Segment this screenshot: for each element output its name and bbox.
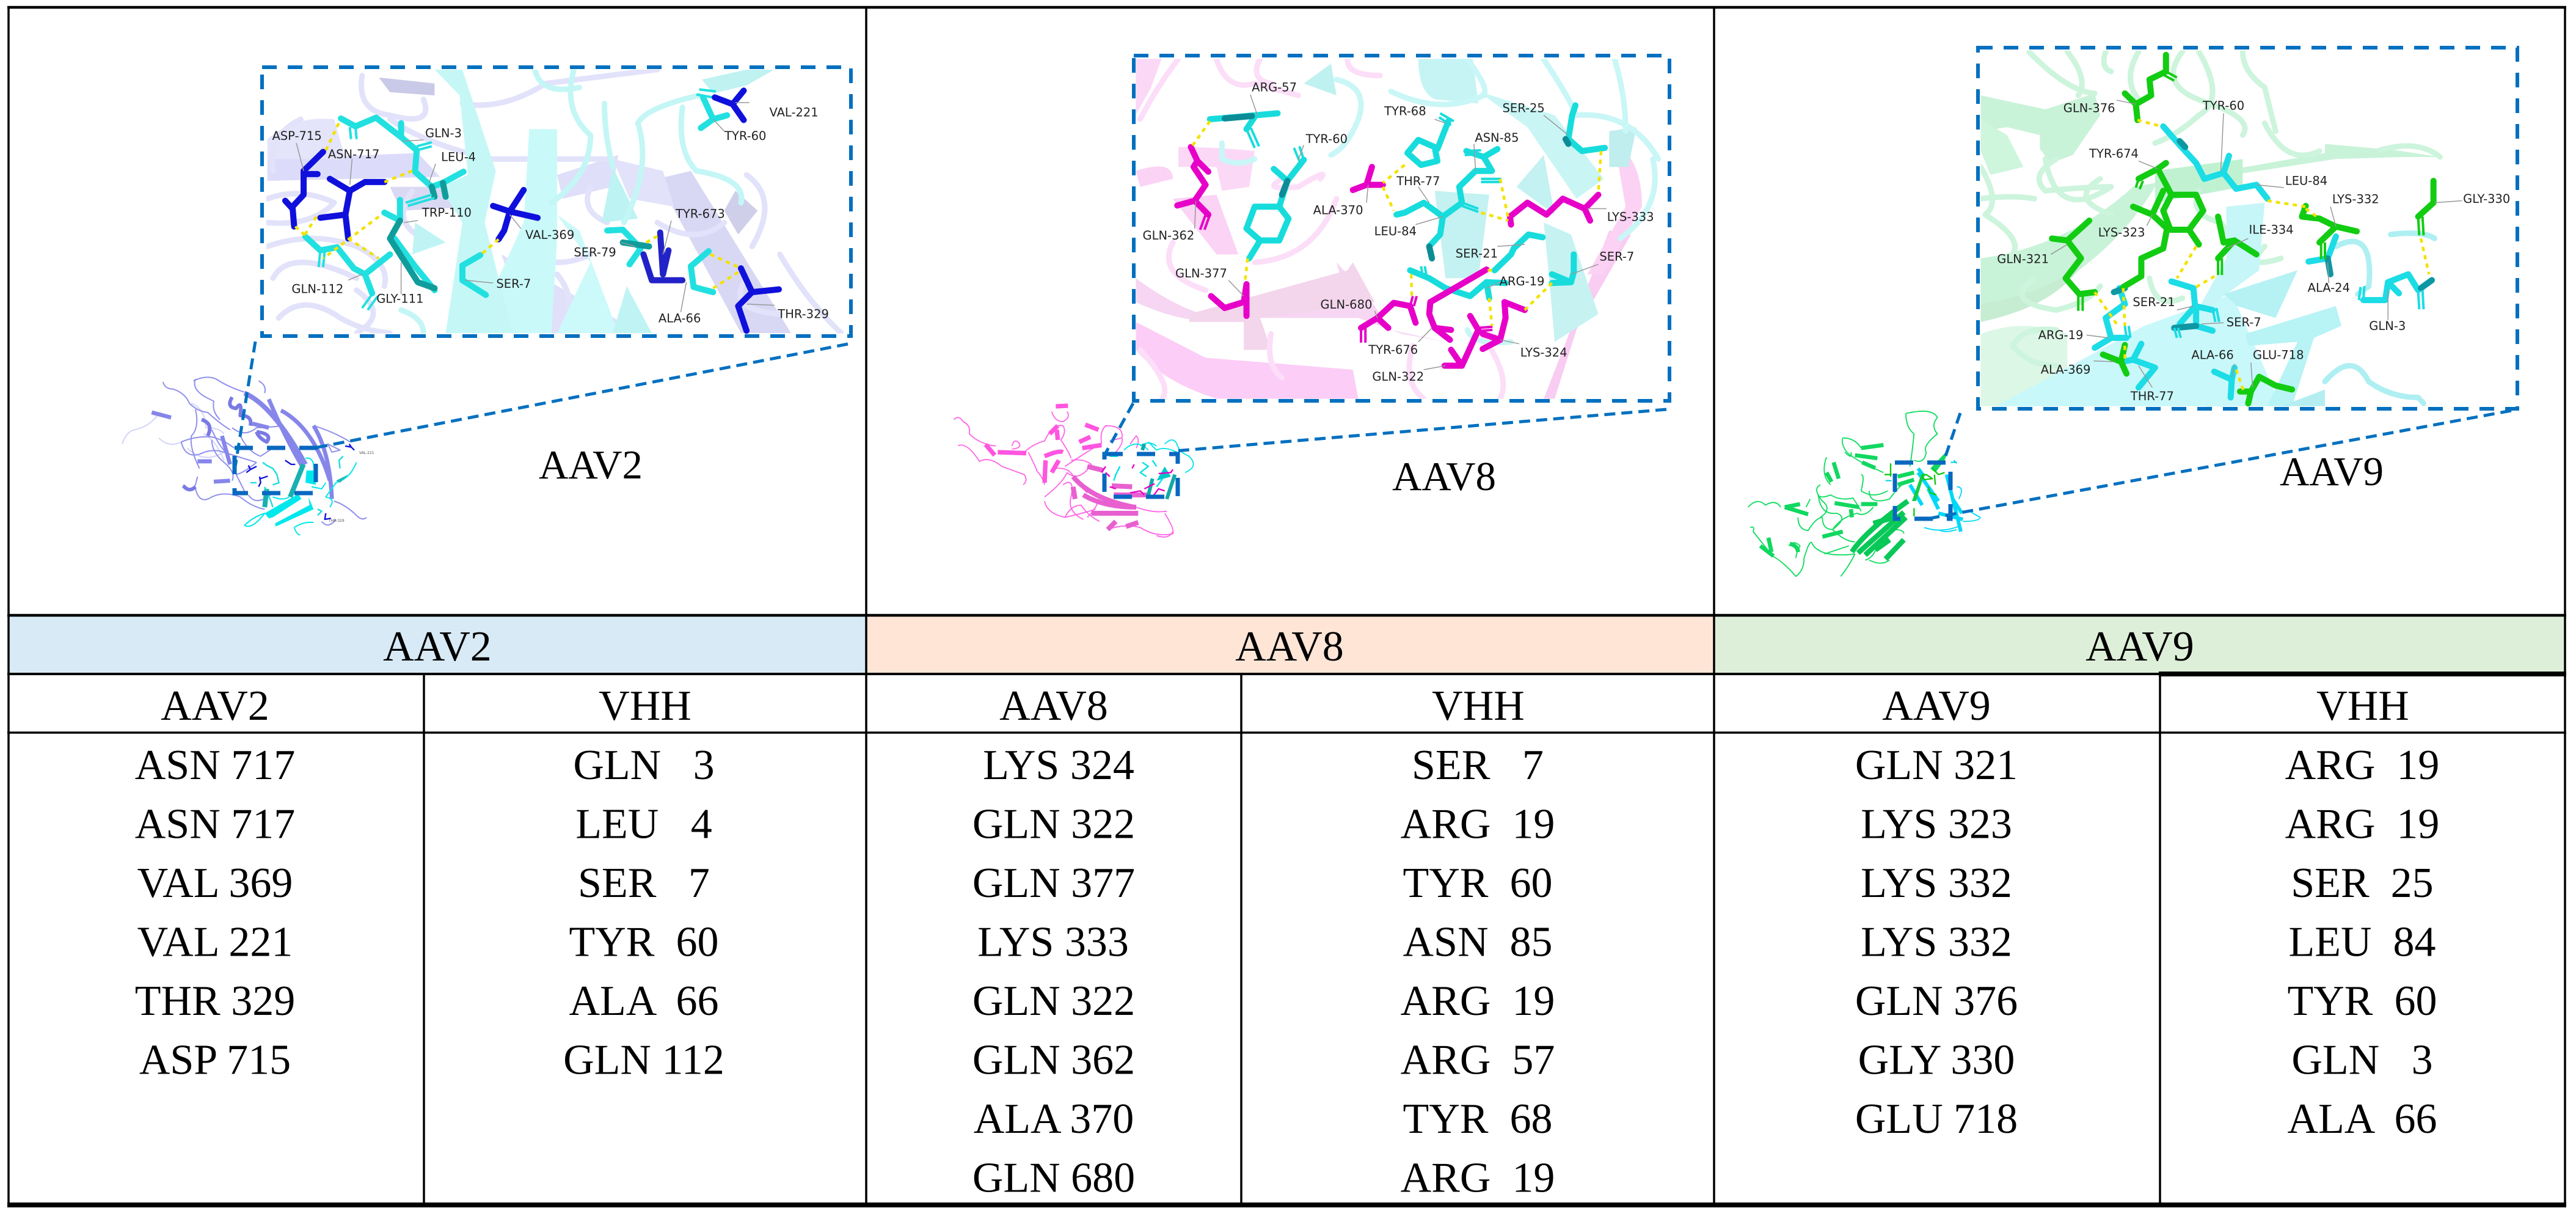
table column: AAV9 residues (1855, 683, 2018, 1143)
AAV8 inset: residue labels: GLN-377 (1175, 266, 1227, 280)
AAV2 inset: residue labels: SER-79 (574, 246, 616, 260)
table column: AAV2 residues: VAL 221 (137, 919, 293, 965)
AAV9 inset: residue labels: ALA-24 (2308, 280, 2350, 295)
table column: AAV8 residues (972, 683, 1135, 1201)
zoom indicator: AAV2 selection box and connector lines (235, 342, 848, 493)
table column: AAV8 residues: AAV8 (999, 683, 1108, 730)
AAV8 inset: residue labels: LYS-333 (1607, 210, 1654, 224)
table column: AAV9 residues: GLU 718 (1855, 1096, 2018, 1143)
AAV8 inset: residue labels: GLN-362 (1142, 229, 1194, 243)
AAV2 inset: residue labels: LEU-4 (441, 150, 476, 164)
AAV2 inset: residue labels: TRP-110 (421, 206, 472, 220)
table column: VHH partners of AAV2: GLN 3 (573, 742, 715, 789)
AAV9 inset: residue labels: TYR-60 (2202, 99, 2244, 113)
table column: AAV8 residues: LYS 324 (983, 742, 1134, 789)
AAV9 inset: residue labels: GLN-321 (1997, 252, 2049, 266)
table column: VHH partners of AAV8: ARG 19 (1401, 800, 1555, 848)
table column: VHH partners of AAV8: ARG 57 (1401, 1036, 1555, 1084)
AAV9 inset: residue labels: SER-7 (2227, 315, 2261, 329)
table column: AAV2 residues: ASN 717 (135, 742, 295, 789)
AAV8 inset: pale ribbon background (1136, 58, 1658, 398)
table column: AAV9 residues: LYS 323 (1861, 800, 2012, 848)
AAV2 inset: AAV2 residue sticks (blue) (285, 90, 779, 331)
table column: AAV2 residues (135, 683, 295, 1084)
table column: VHH partners of AAV9: GLN 3 (2291, 1036, 2433, 1084)
AAV9 inset: residue labels: GLU-718 (2253, 348, 2304, 362)
AAV2 inset: residue labels: VAL-369 (525, 228, 574, 242)
table column: AAV9 residues: GLN 321 (1855, 742, 2018, 789)
AAV2 inset: residue labels: GLN-3 (425, 126, 462, 140)
table column: VHH partners of AAV2: SER 7 (578, 860, 710, 907)
table column: AAV8 residues: GLN 322 (972, 800, 1135, 848)
AAV9 inset: residue labels: LEU-84 (2285, 174, 2327, 188)
table column: AAV8 residues: GLN 680 (972, 1155, 1135, 1201)
table column: AAV9 residues: LYS 332 (1861, 919, 2012, 965)
table column: AAV9 residues: AAV9 (1882, 683, 1991, 730)
table column: AAV9 residues: LYS 332 (1861, 860, 2012, 907)
table column: AAV8 residues: LYS 333 (977, 919, 1129, 965)
table column: VHH partners of AAV9: ALA 66 (2287, 1096, 2437, 1143)
panel caption: AAV2: AAV2 (539, 442, 643, 488)
panel caption: AAV9: AAV9 (2280, 449, 2384, 494)
table header band: AAV8 (866, 617, 1714, 673)
AAV8 inset: residue labels: TYR-68 (1384, 104, 1426, 119)
table header band: AAV2: AAV2 (383, 623, 492, 670)
AAV8 inset: label leader lines (1195, 95, 1607, 370)
AAV2 inset: residue labels: GLY-111 (376, 292, 423, 306)
panel: AAV9 inset close-up (1980, 52, 2510, 406)
AAV9 inset: residue labels: LYS-323 (2098, 225, 2145, 240)
AAV9 inset: residue labels: ALA-66 (2191, 348, 2234, 362)
AAV9 inset: VHH residue sticks (cyan) (2095, 126, 2432, 398)
AAV9 inset: residue labels: SER-21 (2133, 295, 2175, 309)
AAV8 inset: residue labels: SER-25 (1503, 101, 1545, 115)
AAV2 inset: pale ribbon background (268, 70, 841, 333)
AAV9 inset: residue labels: ILE-334 (2249, 222, 2294, 236)
AAV9 inset: residue labels: THR-77 (2130, 389, 2174, 403)
table header band: AAV9: AAV9 (2085, 623, 2194, 670)
table column: AAV8 residues: ALA 370 (974, 1096, 1134, 1143)
AAV8 inset: residue labels: LYS-324 (1520, 345, 1567, 359)
AAV8 inset: residue labels: ARG-57 (1252, 81, 1297, 95)
AAV9 inset: AAV9 residue sticks (green) (2052, 55, 2434, 403)
AAV2 inset: label leader lines (296, 103, 775, 312)
panel: AAV8 inset close-up (1136, 58, 1658, 398)
AAV2 inset: residue labels: TYR-673 (675, 207, 725, 221)
AAV8 inset: AAV8 residue sticks (magenta) (1177, 147, 1598, 365)
AAV2 inset: residue labels: ASP-715 (272, 129, 322, 143)
table column: VHH partners of AAV9: ARG 19 (2285, 742, 2439, 789)
table column: AAV9 residues: GLN 376 (1855, 978, 2018, 1025)
AAV2 inset: VHH residue sticks (cyan) (305, 89, 727, 310)
AAV8 inset: VHH residue sticks (cyan) (1210, 105, 1605, 298)
AAV8 inset: hydrogen bonds (1192, 121, 1601, 326)
icon: AAV9 whole-complex ribbon thumbnail (1748, 411, 1980, 576)
table column: AAV2 residues: AAV2 (161, 683, 269, 730)
AAV9 inset frame (1978, 48, 2517, 409)
table column: AAV8 residues: GLN 377 (972, 860, 1135, 907)
AAV2 inset: residue labels: SER-7 (496, 277, 531, 291)
table header band: AAV2 (9, 617, 866, 673)
AAV9 inset: residue labels: GLY-330 (2463, 192, 2510, 206)
AAV8 inset: residue labels: ALA-370 (1313, 203, 1363, 218)
AAV2 inset: residue labels: GLN-112 (291, 282, 343, 296)
zoom indicator: AAV9 selection box and connector lines (1895, 411, 2511, 519)
table column: VHH partners of AAV9 (2285, 683, 2439, 1143)
AAV9 inset: pale ribbon background (1980, 52, 2440, 406)
table column: AAV8 residues: GLN 362 (972, 1036, 1135, 1084)
table column: VHH partners of AAV2: LEU 4 (575, 800, 712, 848)
AAV9 inset: residue labels: ARG-19 (2038, 328, 2083, 342)
table column: VHH partners of AAV8: ASN 85 (1403, 919, 1553, 965)
icon: AAV8 whole-complex ribbon thumbnail (954, 406, 1194, 537)
AAV2 inset frame (262, 67, 851, 336)
table column: VHH partners of AAV8: TYR 60 (1403, 860, 1553, 907)
table column: AAV2 residues: ASP 715 (139, 1036, 291, 1084)
table column: VHH partners of AAV8 (1401, 683, 1555, 1201)
icon: AAV2 whole-complex ribbon thumbnail (122, 377, 374, 535)
table column: VHH partners of AAV8: ARG 19 (1401, 1155, 1555, 1201)
AAV9 inset: residue labels: GLN-3 (2369, 319, 2406, 333)
zoom indicator: AAV8 selection box and connector lines (1104, 403, 1666, 497)
table column: AAV9 residues: GLY 330 (1858, 1036, 2015, 1084)
AAV2 inset: residue labels: TYR-60 (724, 129, 766, 143)
table column: VHH partners of AAV2: VHH (599, 683, 691, 730)
table header band: AAV8: AAV8 (1235, 623, 1344, 670)
table column: VHH partners of AAV8: ARG 19 (1401, 978, 1555, 1025)
table column: VHH partners of AAV8: TYR 68 (1403, 1096, 1553, 1143)
AAV2 inset: residue labels (272, 106, 829, 326)
table column: VHH partners of AAV9: LEU 84 (2288, 919, 2436, 965)
AAV8 inset: residue labels: GLN-680 (1321, 298, 1372, 312)
AAV2 inset: residue labels: ALA-66 (659, 312, 701, 326)
AAV9 inset: residue labels: TYR-674 (2089, 147, 2139, 161)
table column: AAV2 residues: THR 329 (135, 978, 295, 1025)
AAV9 inset: residue labels (1997, 99, 2510, 403)
AAV9 inset: residue labels: ALA-369 (2041, 362, 2090, 376)
AAV8 inset: residue labels: SER-21 (1456, 247, 1498, 261)
table column: VHH partners of AAV2: ALA 66 (569, 978, 718, 1025)
table column: VHH partners of AAV9: TYR 60 (2287, 978, 2437, 1025)
AAV9 inset: residue labels: GLN-376 (2063, 101, 2115, 115)
table column: VHH partners of AAV2: TYR 60 (569, 919, 718, 965)
AAV8 inset: residue labels: ARG-19 (1500, 274, 1544, 288)
table column: AAV2 residues: ASN 717 (135, 800, 295, 848)
AAV8 inset: residue labels: SER-7 (1599, 250, 1634, 264)
icon: AAV2 whole-complex ribbon thumbnail: THR-329 (328, 519, 345, 523)
table column: AAV8 residues: GLN 322 (972, 978, 1135, 1025)
table column: AAV2 residues: VAL 369 (137, 860, 293, 907)
icon: AAV2 whole-complex ribbon thumbnail: VAL-221 (359, 451, 374, 455)
AAV8 inset: residue labels: GLN-322 (1372, 370, 1424, 384)
table column: VHH partners of AAV8: SER 7 (1412, 742, 1544, 789)
AAV9 inset: label leader lines (2051, 100, 2462, 387)
AAV2 inset: hydrogen bonds (295, 123, 741, 288)
table column: VHH partners of AAV2: GLN 112 (563, 1036, 724, 1084)
AAV2 inset: residue labels: VAL-221 (769, 106, 819, 120)
table column: VHH partners of AAV8: VHH (1432, 683, 1525, 730)
AAV8 inset: residue labels: TYR-676 (1368, 343, 1418, 357)
table column: VHH partners of AAV2 (563, 683, 724, 1084)
table column: VHH partners of AAV9: SER 25 (2291, 860, 2434, 907)
AAV9 inset: hydrogen bonds (2095, 120, 2429, 392)
AAV8 inset: residue labels: LEU-84 (1374, 224, 1417, 238)
AAV8 inset: residue labels (1142, 81, 1654, 384)
AAV2 inset: residue labels: ASN-717 (328, 147, 379, 161)
AAV2 inset: residue labels: THR-329 (777, 307, 829, 321)
AAV8 inset: residue labels: TYR-60 (1305, 132, 1348, 146)
AAV8 inset frame (1134, 56, 1669, 401)
AAV8 inset: residue labels: ASN-85 (1475, 131, 1519, 145)
AAV9 inset: residue labels: LYS-332 (2332, 192, 2379, 206)
panel caption: AAV8: AAV8 (1392, 454, 1496, 499)
table column: VHH partners of AAV9: VHH (2316, 683, 2409, 730)
AAV8 inset: residue labels: THR-77 (1396, 174, 1440, 188)
panel: AAV2 inset close-up (268, 70, 841, 333)
table column: VHH partners of AAV9: ARG 19 (2285, 800, 2439, 848)
table header band: AAV9 (1714, 617, 2565, 673)
